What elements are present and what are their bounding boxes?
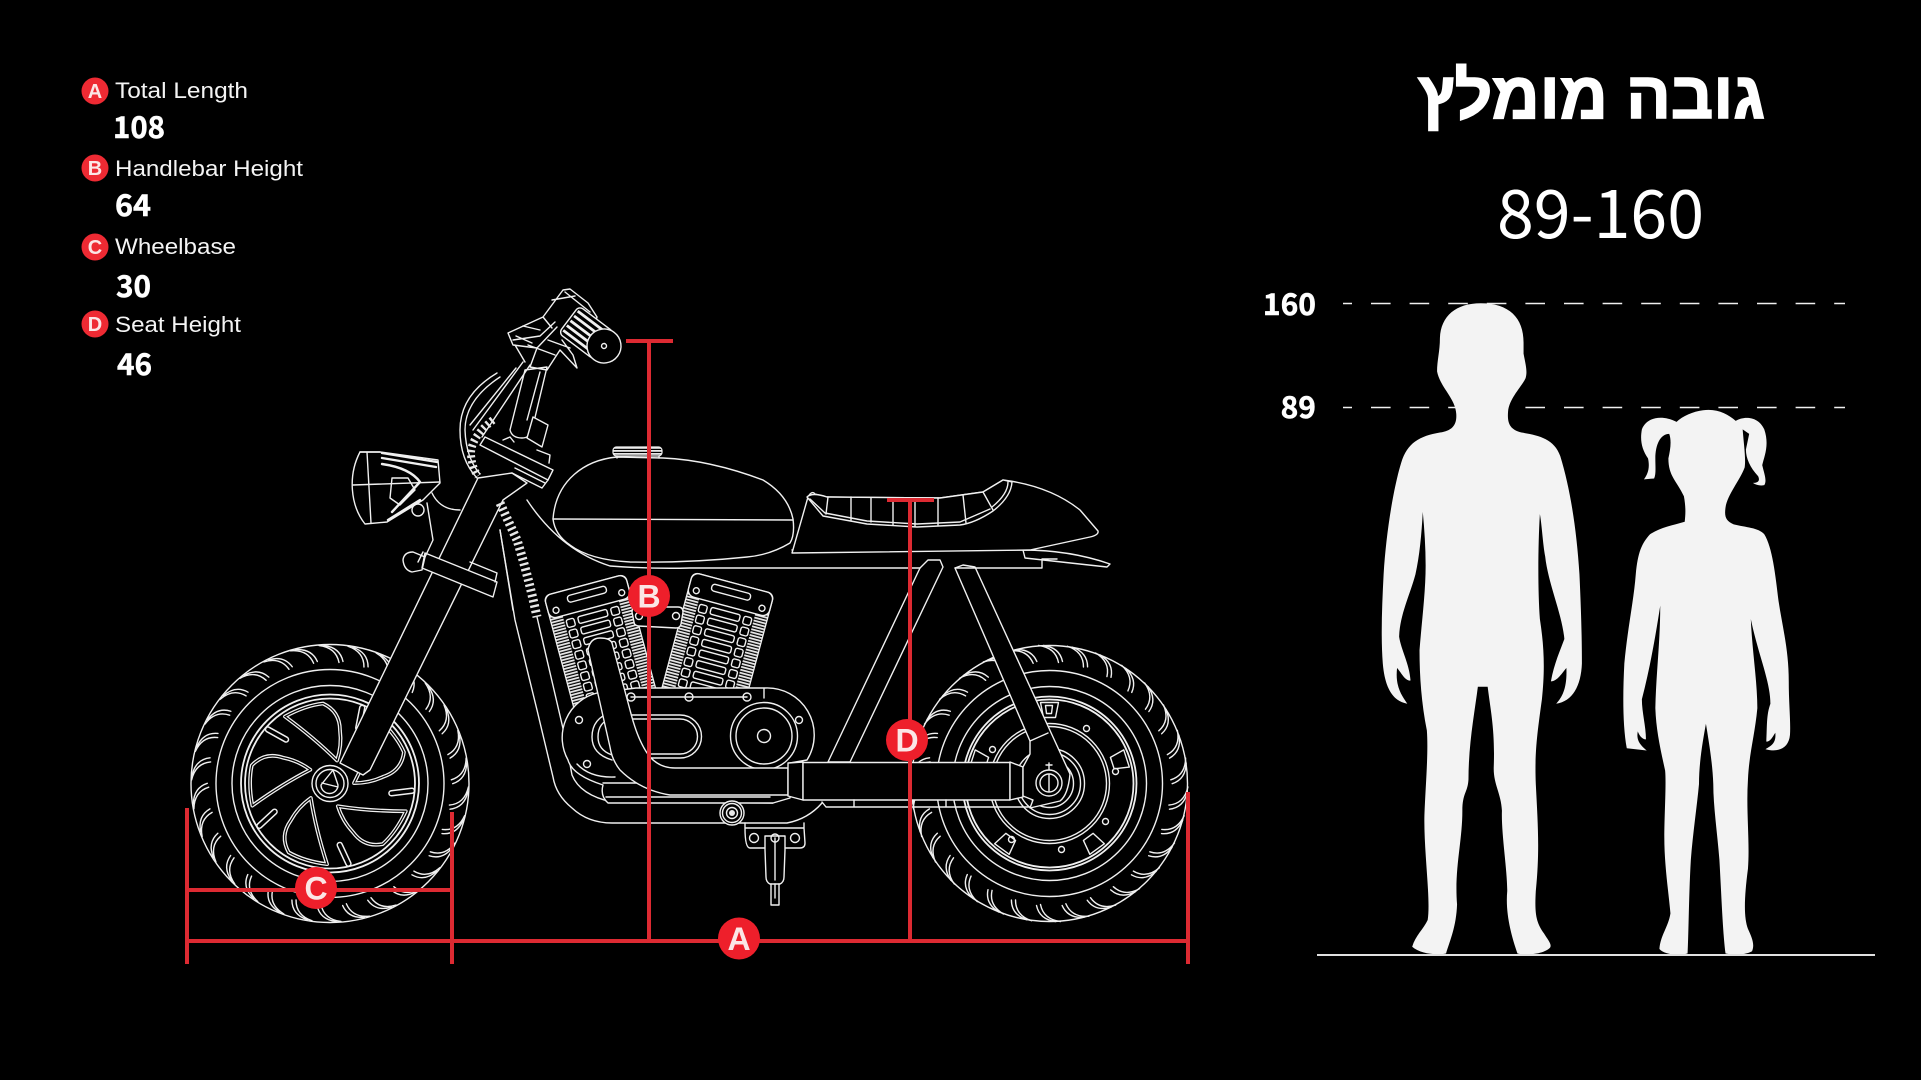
dashed height guides — [1343, 304, 1845, 408]
headlight — [352, 452, 460, 524]
steering column tube — [500, 530, 513, 610]
muffler — [788, 762, 1033, 807]
legend item A: total length: Total Length — [115, 78, 248, 103]
marker B: B — [637, 578, 661, 614]
legend item D: seat height: D — [88, 314, 102, 336]
motorcycle line drawing — [191, 289, 1188, 922]
legend item C: wheelbase: Wheelbase — [115, 234, 236, 259]
legend item C: wheelbase: C — [88, 237, 102, 259]
height range: 89-160 — [1497, 161, 1704, 258]
marker C: C — [304, 870, 328, 906]
silhouette: boy — [1382, 303, 1582, 954]
cables — [460, 362, 540, 478]
height scale labels: 160 — [1263, 280, 1316, 324]
height scale labels: 89 — [1281, 383, 1316, 427]
legend item D: seat height — [82, 310, 241, 384]
legend item B: handlebar height — [82, 154, 303, 225]
dimension B: handlebar height — [626, 341, 673, 941]
fuel tank — [553, 447, 794, 562]
red dimension lines — [187, 341, 1188, 964]
legend item A: total length: 108 — [113, 103, 165, 147]
legend item B: handlebar height: B — [88, 158, 102, 180]
dimension A: total length — [187, 792, 1188, 964]
dimension C: wheelbase — [187, 888, 452, 892]
kickstand — [720, 801, 805, 905]
fork tube — [340, 473, 527, 775]
ground line — [1317, 954, 1875, 956]
top yoke and riser — [480, 367, 553, 488]
dimension D: seat height — [887, 500, 934, 941]
front hub — [312, 766, 348, 802]
marker D: D — [895, 722, 919, 758]
legend item D: seat height: 46 — [117, 340, 152, 384]
title: recommended height: גובה מומלץ — [1418, 58, 1765, 132]
frame backbone and seat rails — [527, 500, 1110, 568]
legend item C: wheelbase: 30 — [116, 262, 151, 306]
coiled brake cable — [500, 503, 537, 617]
exhaust pipe — [588, 638, 788, 795]
silhouette: girl — [1623, 410, 1790, 955]
lower fork clamp and mount — [403, 503, 497, 597]
engine cylinders — [544, 572, 774, 727]
panel: dimension legend — [82, 78, 303, 384]
legend item B: handlebar height: 64 — [115, 181, 151, 225]
lower frame cradle — [500, 530, 822, 823]
legend item B: handlebar height: Handlebar Height — [115, 156, 303, 181]
marker A — [718, 918, 760, 960]
marker D — [886, 719, 928, 761]
marker A: A — [727, 921, 751, 957]
marker B — [628, 575, 670, 617]
seat — [792, 480, 1098, 553]
legend item C: wheelbase — [82, 234, 236, 306]
height scale labels — [1263, 280, 1316, 427]
handlebar controls — [508, 289, 597, 370]
legend item D: seat height: Seat Height — [115, 312, 241, 337]
legend item A: total length — [82, 78, 248, 147]
handlebar grip — [559, 306, 628, 370]
legend item A: total length: A — [88, 81, 102, 103]
rear wheel — [911, 646, 1188, 922]
rear struts and swingarm — [828, 560, 1070, 808]
front wheel — [191, 644, 469, 922]
engine case — [562, 688, 814, 803]
marker C — [295, 867, 337, 909]
